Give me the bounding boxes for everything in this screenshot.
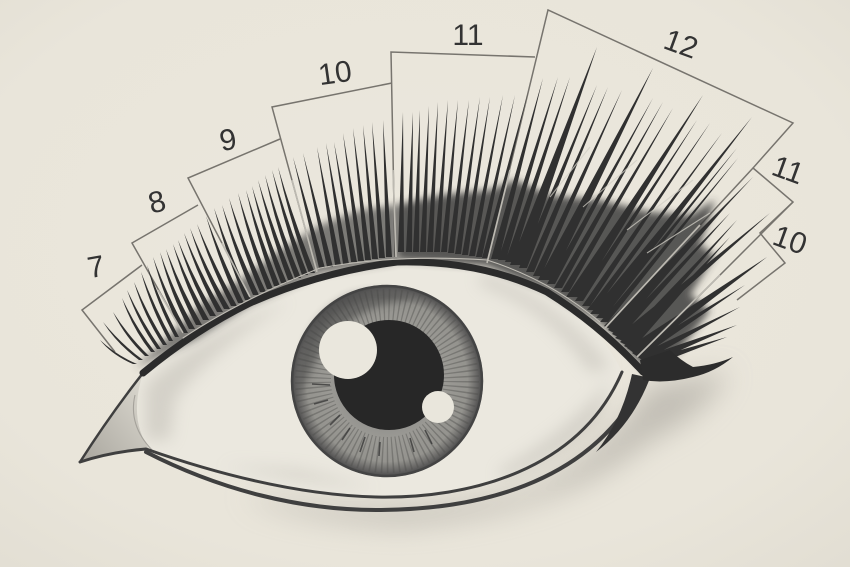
number 12: 12 <box>660 23 702 66</box>
lashes: outer zone 10 <box>627 257 767 366</box>
outer lower lid thickening <box>596 374 650 452</box>
root mass: left lashes <box>135 205 397 368</box>
lashes: zone 11 <box>398 92 528 258</box>
sclera <box>80 262 622 497</box>
inner lower lid line <box>80 372 622 497</box>
outer lower lid line <box>146 380 644 510</box>
number 10 top: 10 <box>316 55 354 92</box>
iris upper left shading <box>300 291 420 395</box>
lashes: outer zone 11 <box>604 177 770 350</box>
sclera shading <box>145 272 610 488</box>
lower dark fibres <box>312 384 432 456</box>
small highlight <box>422 391 454 423</box>
number 10 right: 10 <box>769 219 811 262</box>
lid pale highlight <box>183 258 600 338</box>
large highlight <box>319 321 377 379</box>
pupil <box>334 320 444 430</box>
dark lash root mass <box>135 180 715 372</box>
lashes: zone 9 <box>222 167 315 295</box>
pale separators over lashes <box>158 170 720 357</box>
upper lid line <box>80 258 643 462</box>
lashes: zone 12 <box>491 47 752 322</box>
number 11 top: 11 <box>452 19 484 52</box>
soft shadow around eye <box>240 372 730 525</box>
lashes <box>100 47 770 366</box>
length numbers <box>85 19 811 285</box>
lashes: zone 10 <box>293 120 392 268</box>
number 7: 7 <box>85 250 107 285</box>
lid thick band <box>143 262 643 373</box>
pale streaks between lashes <box>550 147 710 253</box>
iris rim <box>292 286 482 476</box>
lid extension to inner corner <box>80 373 143 462</box>
lower lid double line <box>80 372 644 510</box>
lash length guide boxes <box>82 10 793 352</box>
outer corner wing <box>640 350 733 381</box>
root mass: centre and right lashes <box>397 180 715 372</box>
lashes: zone 7 <box>100 265 179 364</box>
inner waterline <box>133 395 152 450</box>
iris fibres <box>313 307 461 455</box>
number 8: 8 <box>145 184 169 221</box>
lashes: zone 8 <box>153 208 251 333</box>
iris <box>291 285 483 477</box>
tear duct <box>80 373 150 462</box>
number 11 right: 11 <box>768 150 808 191</box>
number 9: 9 <box>217 123 239 158</box>
